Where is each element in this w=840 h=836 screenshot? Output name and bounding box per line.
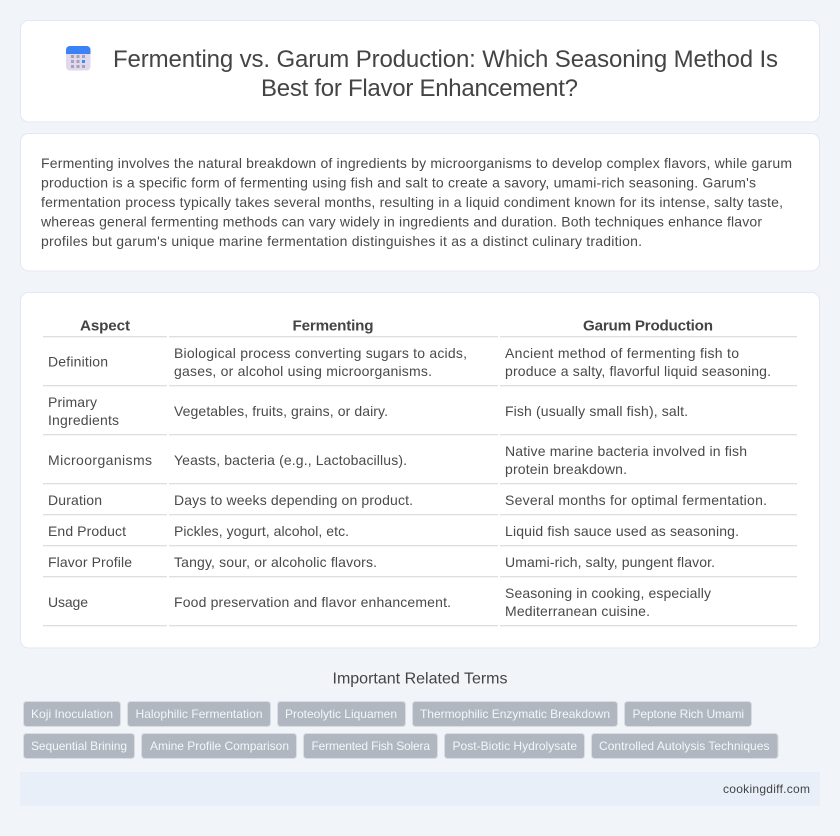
row: end product: Pickles, yogurt, alcohol, etc. xyxy=(174,523,349,539)
footer: cookingdiff.com xyxy=(723,782,810,796)
panel: comparison table xyxy=(20,292,820,648)
row: definition: Biological process converting sugars to acids, xyxy=(174,345,467,361)
tag: fermented fish solera xyxy=(304,734,438,758)
tag: thermophilic enzymatic breakdown: Thermophilic Enzymatic Breakdown xyxy=(420,707,610,721)
row: duration xyxy=(48,492,767,508)
table header: Aspect xyxy=(80,318,130,334)
row: primary ingredients: Ingredients xyxy=(48,412,119,428)
tag: koji inoculation xyxy=(24,702,120,726)
row: duration: Days to weeks depending on product. xyxy=(174,492,413,508)
row: microorganisms: Native marine bacteria involved in fish xyxy=(505,443,747,459)
footer xyxy=(20,772,820,806)
related term tags xyxy=(24,702,778,758)
tag: post-biotic hydrolysate: Post-Biotic Hydrolysate xyxy=(452,739,577,753)
row: usage xyxy=(48,585,711,619)
panel: intro text: fermentation process typically takes several months, resulting in a liquid condiment known for its intense, salty taste, xyxy=(41,194,783,210)
row: end product xyxy=(48,523,739,539)
panel: intro text: profiles but garum's unique marine fermentation distinguishes it as a distinct culinary tradition. xyxy=(41,233,642,249)
tag: proteolytic liquamen: Proteolytic Liquamen xyxy=(285,707,397,721)
row: primary ingredients: Primary xyxy=(48,394,97,410)
row: flavor profile: Tangy, sour, or alcoholic flavors. xyxy=(174,554,377,570)
row: primary ingredients xyxy=(48,394,688,428)
row: definition xyxy=(48,345,771,379)
row: duration: Duration xyxy=(48,492,102,508)
panel: intro text: production is a specific form of fermenting using fish and salt to create a savory, umami-rich seasoning. Garum's xyxy=(41,174,756,190)
row: microorganisms xyxy=(48,443,747,477)
title xyxy=(113,46,778,102)
icon: calendar xyxy=(66,46,90,70)
row: microorganisms: Microorganisms xyxy=(48,452,152,468)
row: usage: Usage xyxy=(48,594,88,610)
tag: fermented fish solera: Fermented Fish Solera xyxy=(312,739,430,753)
title: Fermenting vs. Garum Production: Which Seasoning Method Is xyxy=(113,46,778,73)
tag: controlled autolysis techniques: Controlled Autolysis Techniques xyxy=(599,739,770,753)
row: end product: End Product xyxy=(48,523,126,539)
tag: controlled autolysis techniques xyxy=(592,734,778,758)
panel: header xyxy=(20,20,820,122)
heading: related terms: Important Related Terms xyxy=(332,670,508,688)
row: definition: produce a salty, flavorful liquid seasoning. xyxy=(505,363,771,379)
table row lines xyxy=(43,336,797,626)
tag: peptone rich umami xyxy=(624,702,752,726)
row: definition: Definition xyxy=(48,354,108,370)
row: usage: Mediterranean cuisine. xyxy=(505,603,650,619)
panel: intro text: whereas general fermenting methods can vary widely in ingredients and duration. Both techniques enhance flavor xyxy=(40,214,762,230)
panel: intro text: Fermenting involves the natural breakdown of ingredients by microorganisms to develop complex flavors, while garum xyxy=(41,155,792,171)
row: usage: Seasoning in cooking, especially xyxy=(505,585,711,601)
row: definition: gases, or alcohol using microorganisms. xyxy=(174,363,432,379)
tag: thermophilic enzymatic breakdown xyxy=(412,702,618,726)
table header: Fermenting xyxy=(292,318,374,334)
panel: intro text xyxy=(20,134,820,271)
table header: Garum Production xyxy=(583,318,713,334)
row: flavor profile xyxy=(48,554,715,570)
row: primary ingredients: Vegetables, fruits, grains, or dairy. xyxy=(174,403,388,419)
row: microorganisms: protein breakdown. xyxy=(505,461,627,477)
row: duration: Several months for optimal fermentation. xyxy=(505,492,767,508)
row: flavor profile: Flavor Profile xyxy=(48,554,132,570)
table header xyxy=(80,318,713,334)
tag: amine profile comparison xyxy=(142,734,296,758)
row: end product: Liquid fish sauce used as seasoning. xyxy=(505,523,739,539)
tag: amine profile comparison: Amine Profile Comparison xyxy=(150,739,289,753)
tag: post-biotic hydrolysate xyxy=(444,734,584,758)
title: Best for Flavor Enhancement? xyxy=(261,75,578,102)
tag: halophilic fermentation xyxy=(128,702,270,726)
tag: koji inoculation: Koji Inoculation xyxy=(31,707,113,721)
row: primary ingredients: Fish (usually small fish), salt. xyxy=(505,403,688,419)
row: microorganisms: Yeasts, bacteria (e.g., Lactobacillus). xyxy=(174,452,407,468)
row: usage: Food preservation and flavor enhancement. xyxy=(174,594,451,610)
row: flavor profile: Umami-rich, salty, pungent flavor. xyxy=(505,554,715,570)
tag: peptone rich umami: Peptone Rich Umami xyxy=(632,707,744,721)
row: definition: Ancient method of fermenting fish to xyxy=(505,345,739,361)
tag: sequential brining: Sequential Brining xyxy=(31,739,127,753)
tag: halophilic fermentation: Halophilic Fermentation xyxy=(136,707,262,721)
tag: proteolytic liquamen xyxy=(278,702,406,726)
tag: sequential brining xyxy=(24,734,134,758)
